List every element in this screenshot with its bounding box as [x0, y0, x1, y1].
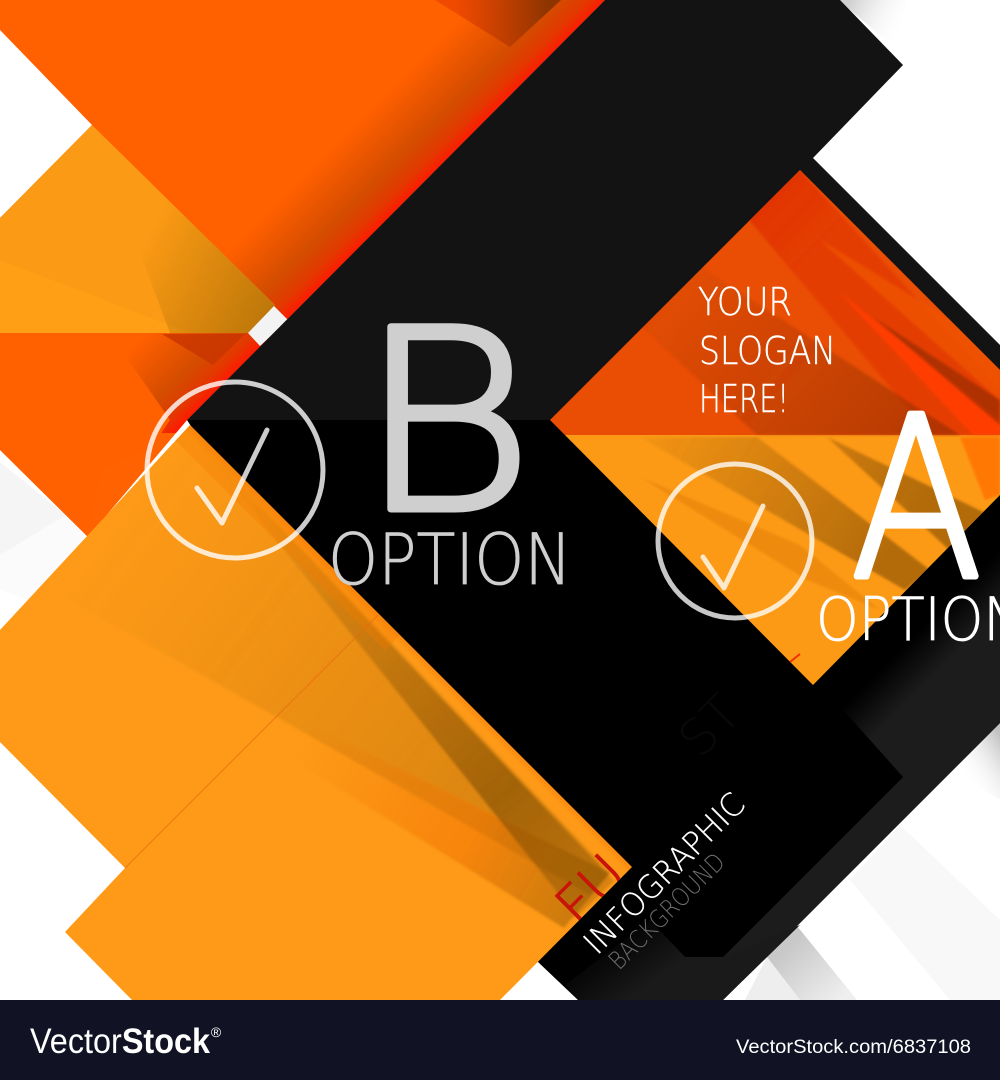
- text block: slogan: [698, 280, 836, 421]
- title: INFOGRAPHIC: INFOGRAPHIC: [576, 785, 753, 962]
- white top-left cutout: [0, 30, 92, 218]
- panel: dark bottom gradient: [565, 920, 800, 1000]
- panel: dark lower right band: [700, 498, 1000, 1000]
- panel: black central area: [187, 420, 1000, 1000]
- icon: check circle B: [147, 382, 323, 558]
- panel: dark top wedge: [187, 0, 1000, 420]
- text block: slogan: YOUR: [698, 280, 792, 324]
- red ghost tick on diamond: [790, 654, 800, 662]
- ghost letters: FU: FU: [543, 842, 639, 938]
- panel: top-left red-orange square: [0, 0, 620, 540]
- white notch: [248, 306, 288, 346]
- panel: top-left light orange square: [0, 120, 280, 335]
- icon: check circle A: [658, 464, 812, 618]
- footer registered mark: ®: [211, 1024, 222, 1040]
- footer logo: VectorStock: [30, 1022, 210, 1061]
- text block: slogan: SLOGAN: [699, 329, 836, 373]
- ghost letters: ST: ST: [667, 683, 753, 768]
- panel: slogan orange diamond: [550, 170, 1000, 690]
- panel: lower-left orange square: [0, 420, 640, 1000]
- heading: letter A: A: [851, 371, 982, 629]
- label: OPTION B: OPTION: [328, 519, 572, 601]
- heading: letter B: B: [358, 277, 534, 568]
- footer image id: VectorStock.com/6837108: [736, 1037, 971, 1058]
- footer bar: [0, 1000, 1000, 1080]
- panel: black inner tip: [650, 700, 903, 957]
- text block: slogan: HERE!: [699, 377, 789, 421]
- subtitle: BACKGROUND: BACKGROUND: [603, 847, 731, 975]
